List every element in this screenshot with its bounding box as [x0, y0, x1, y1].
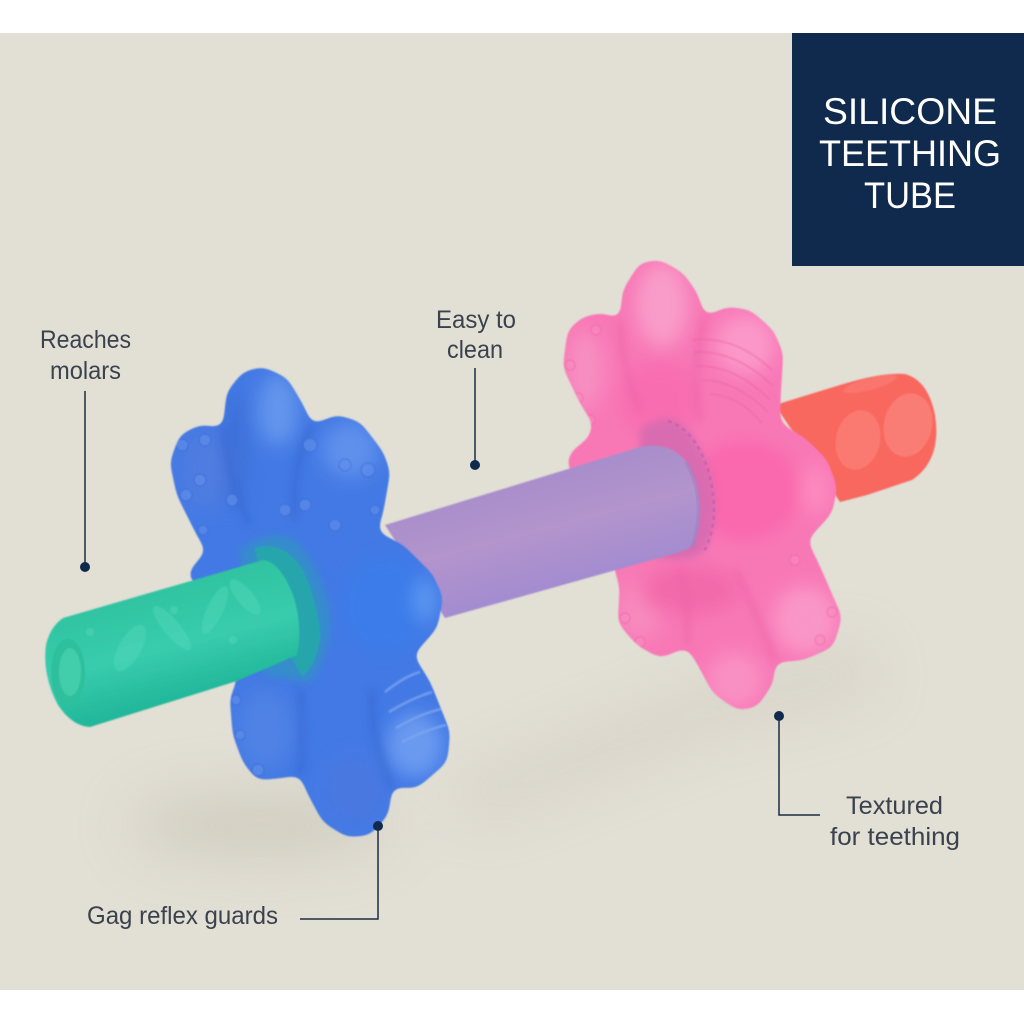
product shadow [130, 640, 880, 857]
pink flower guard [562, 260, 842, 710]
blue lobe ribs [385, 672, 446, 742]
callout: gag reflex guards [87, 821, 383, 930]
pink lobe ribs [706, 339, 772, 422]
title box: TUBE [864, 175, 956, 216]
callout: textured for teething: Textured [846, 792, 943, 820]
green end tube [45, 560, 299, 727]
purple tube with collar [385, 419, 715, 618]
collar ring [640, 419, 715, 559]
callout: reaches molars [40, 326, 131, 572]
callout: reaches molars: molars [50, 357, 121, 385]
pink lobe creases [762, 622, 773, 651]
coral end tube [775, 371, 938, 502]
callout: textured for teething: for teething [830, 823, 960, 851]
title box: SILICONE [823, 91, 997, 132]
callout: gag reflex guards: Gag reflex guards [87, 902, 278, 930]
callout: textured for teething [774, 711, 960, 851]
teal collar [240, 536, 330, 682]
green hole [51, 639, 85, 705]
callout: easy to clean: Easy to [436, 306, 516, 334]
teething tube product [45, 240, 938, 845]
pink lobe bumps [566, 360, 838, 646]
blue flower guard [170, 367, 450, 838]
title box: TEETHING [819, 133, 1001, 174]
callout: reaches molars: Reaches [40, 326, 131, 354]
title box [792, 33, 1024, 266]
callout: easy to clean [436, 306, 516, 470]
blue lobe creases [225, 425, 392, 787]
callout: easy to clean: clean [447, 336, 503, 364]
green embossed pattern [86, 575, 265, 676]
blue lobe bumps [176, 434, 380, 776]
